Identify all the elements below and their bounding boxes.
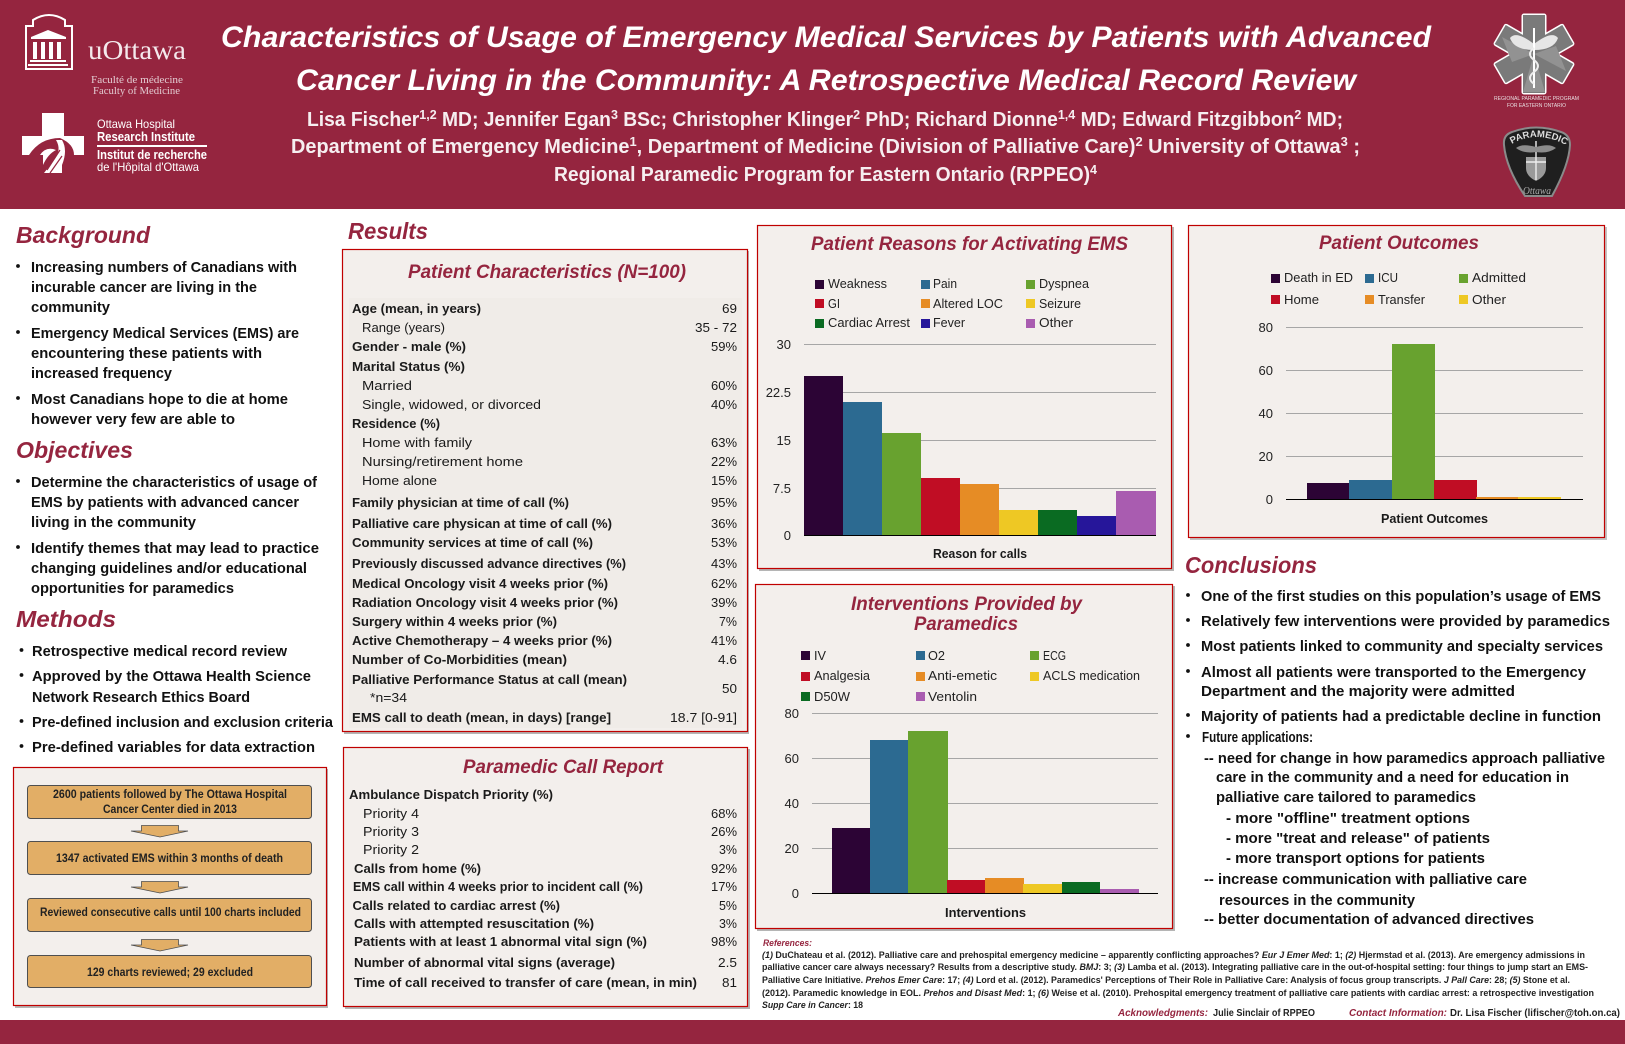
chart title: Paramedics (914, 614, 1018, 635)
table rows: Married (362, 378, 412, 393)
references (762, 938, 1594, 1011)
section: objectives: opportunities for paramedics (31, 580, 234, 597)
section: conclusions: -- need for change in how paramedics approach palliative (1204, 750, 1605, 767)
section: methods: Pre-defined variables for data extraction (32, 739, 315, 756)
bar chart: outcomes: 80 (1259, 320, 1273, 335)
references: Supp Care in Cancer: 18 (762, 1000, 863, 1011)
table rows: Previously discussed advance directives (%) (352, 556, 626, 571)
logo: paramedic badge (1502, 126, 1571, 197)
logo: Ottawa Hospital Research Institute: Ottawa Hospital (97, 117, 175, 131)
panel: paramedic call report (344, 748, 750, 1009)
table rows: 7% (719, 614, 737, 629)
logo: Ottawa Hospital Research Institute: Research Institute (97, 129, 195, 144)
table rows: 39% (711, 595, 737, 610)
panel: patient outcomes chart (1188, 226, 1607, 540)
chart legend: D50W (814, 689, 851, 704)
references: (2012). Paramedic knowledge in EOL. Prehos and Disast Med: 1; (6) Weise et al. (2010). Prehospital emergency treatment of palliative care patients with cardiac arrest: a retrospective investigation (762, 988, 1594, 999)
flow box: 129 charts reviewed (28, 956, 312, 988)
acknowledgments: Julie Sinclair of RPPEO (1213, 1007, 1315, 1019)
table rows: 18.7 [0-91] (670, 710, 737, 725)
table rows: Time of call received to transfer of care (mean, in min) (354, 975, 697, 990)
authors and affiliations: 1 (629, 134, 637, 149)
bar chart: interventions: Interventions (945, 905, 1026, 920)
section: conclusions: Relatively few interventions were provided by paramedics (1201, 613, 1610, 630)
bar chart: reasons: 7.5 (773, 481, 791, 496)
section: background: community (31, 299, 111, 316)
table title: Patient Characteristics (N=100) (408, 262, 686, 283)
section: conclusions: -- better documentation of advanced directives (1204, 911, 1534, 928)
bar chart: reasons: 0 (784, 528, 791, 543)
section: conclusions: - more transport options for patients (1226, 850, 1485, 867)
chart title: Patient Reasons for Activating EMS (811, 234, 1128, 255)
table rows: Home alone (362, 473, 437, 488)
table rows: Number of abnormal vital signs (average) (354, 955, 615, 970)
chart legend: Altered LOC (933, 296, 1003, 311)
table rows: Calls with attempted resuscitation (%) (354, 916, 594, 931)
chart legend: Fever (933, 315, 966, 330)
authors and affiliations: Department of Emergency Medicine (291, 136, 631, 158)
bar chart: outcomes (1259, 320, 1583, 526)
chart legend: Ventolin (928, 689, 977, 704)
section: conclusions: palliative care tailored to paramedics (1216, 789, 1476, 806)
table rows: Priority 3 (363, 824, 419, 839)
flow box: reviewed consecutive calls: Reviewed consecutive calls until 100 charts included (40, 907, 301, 919)
table rows: Family physician at time of call (%) (352, 495, 569, 510)
table rows: 98% (711, 934, 737, 949)
table rows: Patients with at least 1 abnormal vital sign (%) (354, 934, 647, 949)
chart legend: Weakness (828, 276, 887, 291)
section: objectives: Determine the characteristics of usage of (31, 474, 318, 491)
title (221, 21, 1432, 97)
section: background: however very few are able to (31, 411, 235, 428)
table rows: Calls related to cardiac arrest (%) (352, 898, 560, 913)
section: conclusions: Majority of patients had a predictable decline in function (1201, 708, 1601, 725)
authors and affiliations: BSc; Christopher Klinger (618, 109, 853, 131)
authors and affiliations (291, 107, 1360, 186)
authors and affiliations: 1,4 (1058, 107, 1076, 122)
authors and affiliations: PhD; Richard Dionne (860, 109, 1058, 131)
table rows: Nursing/retirement home (362, 454, 523, 469)
table rows: *n=34 (370, 690, 407, 705)
chart legend: O2 (928, 648, 945, 663)
section: conclusions: One of the first studies on this population’s usage of EMS (1201, 588, 1601, 605)
section: conclusions (1185, 552, 1610, 928)
table rows: 35 - 72 (695, 320, 737, 335)
contact information (1349, 1007, 1620, 1019)
table rows: EMS call within 4 weeks prior to incident call (%) (353, 879, 643, 894)
table rows: Number of Co-Morbidities (mean) (352, 652, 567, 667)
table rows: 43% (711, 556, 737, 571)
authors and affiliations: ; (1348, 136, 1360, 158)
chart legend: Cardiac Arrest (828, 315, 910, 330)
table rows: Palliative care physican at time of call (%) (352, 516, 612, 531)
section: conclusions: Conclusions (1185, 552, 1317, 578)
contact information: Contact Information: (1349, 1007, 1447, 1019)
logo: regional paramedic program star of life: FOR EASTERN ONTARIO (1507, 103, 1567, 109)
table rows: 60% (711, 378, 737, 393)
section: conclusions: Future applications: (1202, 729, 1313, 746)
section: background: encountering these patients with (31, 345, 262, 362)
table rows (349, 787, 737, 990)
table rows: 22% (711, 454, 737, 469)
authors and affiliations: Regional Paramedic Program for Eastern Ontario (RPPEO) (554, 164, 1110, 186)
authors and affiliations: 1,2 (419, 107, 437, 122)
heading: results: Results (348, 218, 428, 244)
authors and affiliations: 4 (1090, 162, 1098, 177)
table rows: Priority 4 (363, 806, 419, 821)
section: conclusions: - more "offline" treatment options (1226, 810, 1470, 827)
table rows: 81 (722, 975, 737, 990)
table rows: Residence (%) (352, 416, 440, 431)
authors and affiliations: 2 (853, 107, 860, 122)
arrow (131, 940, 188, 951)
table rows: 50 (722, 681, 737, 696)
chart legend: Seizure (1039, 296, 1081, 311)
bar chart: reasons: 30 (777, 337, 791, 352)
table rows: Age (mean, in years) (352, 301, 481, 316)
section: methods: Methods (16, 606, 116, 632)
authors and affiliations: MD; (1301, 109, 1343, 131)
flow box: 2600 patients: 2600 patients followed by The Ottawa Hospital (53, 789, 287, 801)
header band (0, 0, 1625, 209)
authors and affiliations: 3 (611, 107, 618, 122)
section: conclusions: Most patients linked to community and specialty services (1201, 638, 1603, 655)
chart legend: Analgesia (814, 668, 871, 683)
table rows: EMS call to death (mean, in days) [range] (352, 710, 611, 725)
table rows: Surgery within 4 weeks prior (%) (352, 614, 557, 629)
section: objectives: changing guidelines and/or educational (31, 560, 307, 577)
bar chart: interventions: 0 (792, 886, 799, 901)
logo: uOttawa: uOttawa (88, 35, 186, 65)
section: conclusions: resources in the community (1219, 892, 1416, 909)
table rows: 2.5 (718, 955, 737, 970)
arrow (131, 826, 188, 837)
chart legend: Other (1472, 292, 1507, 307)
logo: uOttawa (26, 15, 186, 97)
chart legend (815, 276, 1090, 330)
references: References: (763, 938, 812, 949)
table rows: Radiation Oncology visit 4 weeks prior (%) (352, 595, 618, 610)
acknowledgments (1117, 1007, 1315, 1019)
logo: Ottawa Hospital Research Institute: Institut de recherche (97, 147, 207, 162)
logo: Ottawa Hospital Research Institute (22, 113, 207, 176)
bar chart: outcomes: 60 (1259, 363, 1273, 378)
section: methods: Network Research Ethics Board (32, 689, 250, 706)
panel: patient reasons chart (758, 226, 1174, 571)
chart legend: Other (1039, 315, 1074, 330)
authors and affiliations: Lisa Fischer (307, 109, 424, 131)
section: conclusions: care in the community and a need for education in (1216, 769, 1569, 786)
title: Characteristics of Usage of Emergency Medical Services by Patients with Advanced (221, 21, 1432, 54)
table rows: 4.6 (718, 652, 737, 667)
table rows: 62% (711, 576, 737, 591)
section: methods (16, 606, 334, 756)
table rows: 5% (719, 898, 737, 913)
bar chart: interventions: 60 (785, 751, 799, 766)
table rows: Active Chemotherapy – 4 weeks prior (%) (352, 633, 612, 648)
section: objectives: Objectives (16, 437, 133, 463)
chart legend: ICU (1378, 270, 1398, 285)
table rows: Community services at time of call (%) (352, 535, 593, 550)
section: conclusions: - more "treat and release" of patients (1226, 830, 1490, 847)
table rows: Palliative Performance Status at call (mean) (352, 672, 627, 687)
section: objectives (16, 437, 319, 597)
table rows: 36% (711, 516, 737, 531)
table rows: 17% (711, 879, 737, 894)
section: objectives: Identify themes that may lead to practice (31, 540, 319, 557)
table rows: 3% (719, 916, 737, 931)
section: methods: Pre-defined inclusion and exclusion criteria (32, 714, 334, 731)
bar chart: interventions: 80 (785, 706, 799, 721)
title: Cancer Living in the Community: A Retrospective Medical Record Review (296, 64, 1358, 97)
chart legend: GI (828, 296, 840, 311)
bar chart: outcomes: 40 (1259, 406, 1273, 421)
chart legend: Dyspnea (1039, 276, 1090, 291)
bar chart: outcomes: Patient Outcomes (1381, 511, 1488, 526)
chart legend: Anti-emetic (928, 668, 998, 683)
section: background: increased frequency (31, 365, 173, 382)
flow box: 129 charts reviewed: 129 charts reviewed; 29 excluded (87, 967, 253, 979)
section: conclusions: -- increase communication with palliative care (1204, 871, 1527, 888)
section: methods: Approved by the Ottawa Health Science (32, 668, 311, 685)
chart title: Patient Outcomes (1319, 233, 1479, 254)
table title: Paramedic Call Report (463, 757, 664, 778)
references: palliative cancer care always necessary? Results from a descriptive study. BMJ: 3; (3) Lamba et al. (2013). Integrating palliative care in the out-of-hospital setting: four things to jump start an EMS- (762, 962, 1588, 973)
table rows: 53% (711, 535, 737, 550)
section: objectives: living in the community (31, 514, 197, 531)
logo: paramedic badge: PARAMEDIC (1509, 130, 1568, 144)
section: background: incurable cancer are living in the (31, 279, 257, 296)
chart legend: IV (814, 648, 826, 663)
bar chart: outcomes: 0 (1266, 492, 1273, 507)
bar chart: interventions: 40 (785, 796, 799, 811)
chart legend: ACLS medication (1043, 668, 1140, 683)
chart title: Interventions Provided by (851, 594, 1083, 615)
bar chart: interventions: 20 (785, 841, 799, 856)
authors and affiliations: MD; Jennifer Egan (437, 109, 611, 131)
section: conclusions: Department and the majority were admitted (1201, 683, 1515, 700)
chart legend: Transfer (1378, 292, 1426, 307)
section: background: Increasing numbers of Canadians with (31, 259, 297, 276)
table rows: Marital Status (%) (352, 359, 465, 374)
authors and affiliations: , Department of Medicine (Division of Palliative Care) (637, 136, 1135, 158)
table rows: Priority 2 (363, 842, 419, 857)
logo: regional paramedic program star of life (1494, 15, 1579, 109)
chart legend: Admitted (1472, 270, 1526, 285)
table rows: 63% (711, 435, 737, 450)
logo: Ottawa Hospital Research Institute: de l'Hôpital d'Ottawa (97, 160, 199, 174)
references: (1) DuChateau et al. (2012). Palliative care and prehospital emergency medicine – apparently conflicting approaches? Eur J Emer Med: 1; (2) Hjermstad et al. (2013). Are emergency admissions in (762, 950, 1585, 961)
table rows: Medical Oncology visit 4 weeks prior (%) (352, 576, 608, 591)
chart legend: ECG (1043, 648, 1066, 663)
logo: uOttawa: Faculté de médecine (91, 75, 183, 86)
authors and affiliations: 2 (1294, 107, 1301, 122)
authors and affiliations: 3 (1341, 134, 1348, 149)
table rows: Gender - male (%) (352, 339, 466, 354)
table rows: 40% (711, 397, 737, 412)
chart legend: Death in ED (1284, 270, 1353, 285)
flow box: 2600 patients (28, 786, 312, 818)
chart legend: Home (1284, 292, 1319, 307)
logo: paramedic badge: Ottawa (1523, 186, 1551, 197)
table rows: 92% (711, 861, 737, 876)
table rows: 26% (711, 824, 737, 839)
flow box: 1347 activated EMS (28, 842, 312, 874)
bar chart: reasons: Reason for calls (933, 546, 1027, 561)
bar chart: interventions (785, 706, 1158, 920)
table rows: Home with family (362, 435, 473, 450)
table rows: 3% (719, 842, 737, 857)
section: background (16, 222, 299, 428)
arrow (131, 882, 188, 893)
acknowledgments: Acknowledgments: (1117, 1007, 1208, 1019)
flow box: 1347 activated EMS: 1347 activated EMS within 3 months of death (56, 853, 283, 865)
chart legend (801, 648, 1140, 704)
table rows: 68% (711, 806, 737, 821)
section: conclusions: Almost all patients were transported to the Emergency (1201, 664, 1587, 681)
panel: patient characteristics table (342, 250, 749, 734)
table rows: Ambulance Dispatch Priority (%) (349, 787, 553, 802)
chart legend: Pain (933, 276, 957, 291)
flow box: reviewed consecutive calls (28, 898, 312, 932)
panel: study flow diagram (14, 768, 328, 1008)
chart legend (1271, 270, 1526, 307)
table rows: Range (years) (362, 320, 445, 335)
bar chart: reasons: 15 (777, 433, 791, 448)
bar chart: reasons (766, 337, 1156, 561)
panel: interventions chart (756, 584, 1175, 931)
footer band (0, 1020, 1625, 1044)
authors and affiliations: University of Ottawa (1143, 136, 1342, 158)
table rows (352, 301, 737, 725)
table rows: 15% (711, 473, 737, 488)
table rows: 95% (711, 495, 737, 510)
section: background: Emergency Medical Services (EMS) are (31, 325, 299, 342)
section: methods: Retrospective medical record review (32, 643, 287, 660)
table rows: 41% (711, 633, 737, 648)
section: background: Most Canadians hope to die at home (31, 391, 288, 408)
section: objectives: EMS by patients with advanced cancer (31, 494, 299, 511)
table rows: 59% (711, 339, 737, 354)
bar chart: reasons: 22.5 (766, 385, 791, 400)
table rows: Calls from home (%) (354, 861, 481, 876)
chart title (851, 594, 1083, 635)
authors and affiliations: 2 (1135, 134, 1143, 149)
section: background: Background (16, 222, 151, 248)
references: Palliative Care Initiative. Prehos Emer Care: 17; (4) Lord et al. (2012). Paramedics' Perceptions of Their Role in Palliative Care: Analysis of focus group transcripts. J Pall Care: 28; (5) Stone et al. (762, 975, 1570, 986)
logo: uOttawa: Faculty of Medicine (93, 86, 180, 97)
authors and affiliations: MD; Edward Fitzgibbon (1075, 109, 1294, 131)
logo: regional paramedic program star of life: REGIONAL PARAMEDIC PROGRAM (1494, 96, 1579, 102)
flow box: 2600 patients: Cancer Center died in 2013 (103, 804, 237, 816)
table rows: 69 (722, 301, 737, 316)
table rows: Single, widowed, or divorced (362, 397, 541, 412)
bar chart: outcomes: 20 (1259, 449, 1273, 464)
